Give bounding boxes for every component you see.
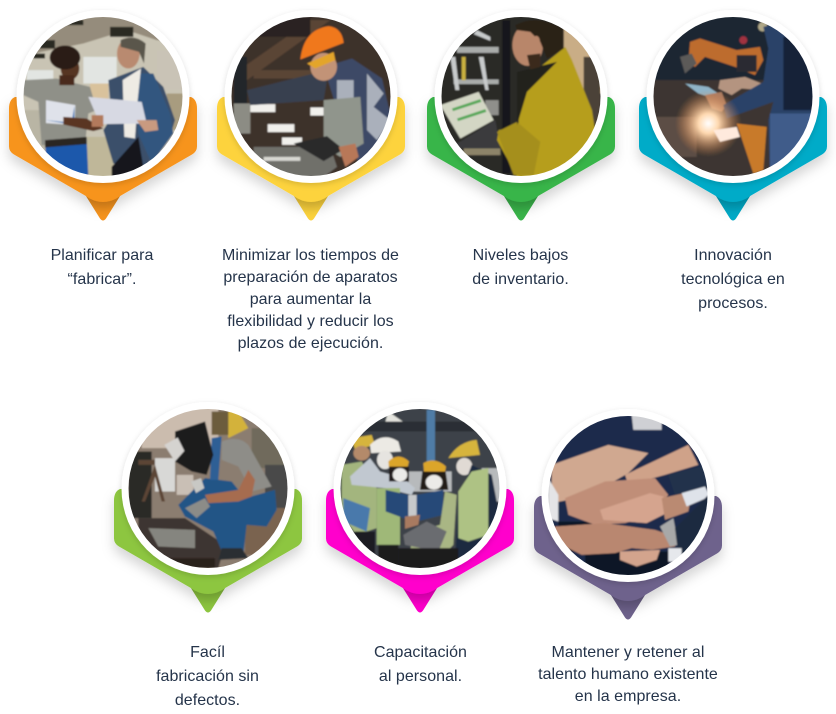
caption: plazos de ejecución. (238, 335, 383, 352)
badge: blue (639, 10, 827, 220)
caption: preparación de aparatos (223, 269, 398, 286)
badge: orange (9, 10, 197, 220)
caption: en la empresa. (575, 688, 681, 705)
card: innovacion (639, 10, 827, 312)
photo: welder crouching (128, 409, 288, 568)
photo: stacked hands (548, 416, 708, 575)
caption: de inventario. (472, 271, 569, 288)
badge: lime (114, 402, 302, 612)
caption (222, 247, 399, 352)
photo: worker with orange helmet at machine (232, 17, 390, 176)
photo: team with helmets and masks reading folder (340, 409, 500, 568)
caption: Niveles bajos (473, 247, 568, 264)
caption (156, 644, 259, 709)
caption: Capacitación (374, 644, 467, 661)
caption: fabricación sin (156, 668, 259, 685)
badge: yellow (217, 10, 405, 220)
caption (374, 644, 467, 685)
card: inventario (427, 10, 615, 288)
caption: “fabricar”. (68, 271, 136, 288)
caption: tecnológica en (681, 271, 785, 288)
caption: talento humano existente (538, 666, 718, 683)
caption (681, 247, 785, 312)
card: planificar (9, 10, 197, 288)
caption: flexibilidad y reducir los (227, 313, 394, 330)
caption: al personal. (379, 668, 462, 685)
caption (538, 644, 718, 705)
caption: procesos. (698, 295, 768, 312)
caption (51, 247, 153, 288)
badge: purple (534, 409, 722, 620)
card: minimizar (217, 10, 405, 352)
caption: Mantener y retener al (552, 644, 704, 661)
caption: Facíl (190, 644, 225, 661)
card: capacitacion (326, 402, 514, 685)
caption: Planificar para (51, 247, 153, 264)
caption: Innovación (694, 247, 772, 264)
caption: para aumentar la (250, 291, 371, 308)
caption (472, 247, 569, 288)
photo: two men with plans in a factory (24, 17, 182, 176)
caption: defectos. (175, 692, 240, 709)
badge: green (427, 10, 615, 220)
photo: robotic arm and tablet (654, 17, 812, 176)
photo: technician in yellow jacket at server rack (442, 17, 600, 176)
card: talento (534, 408, 722, 705)
badge: magenta (326, 402, 514, 612)
caption: Minimizar los tiempos de (222, 247, 399, 264)
card: fabricacion (114, 402, 302, 709)
